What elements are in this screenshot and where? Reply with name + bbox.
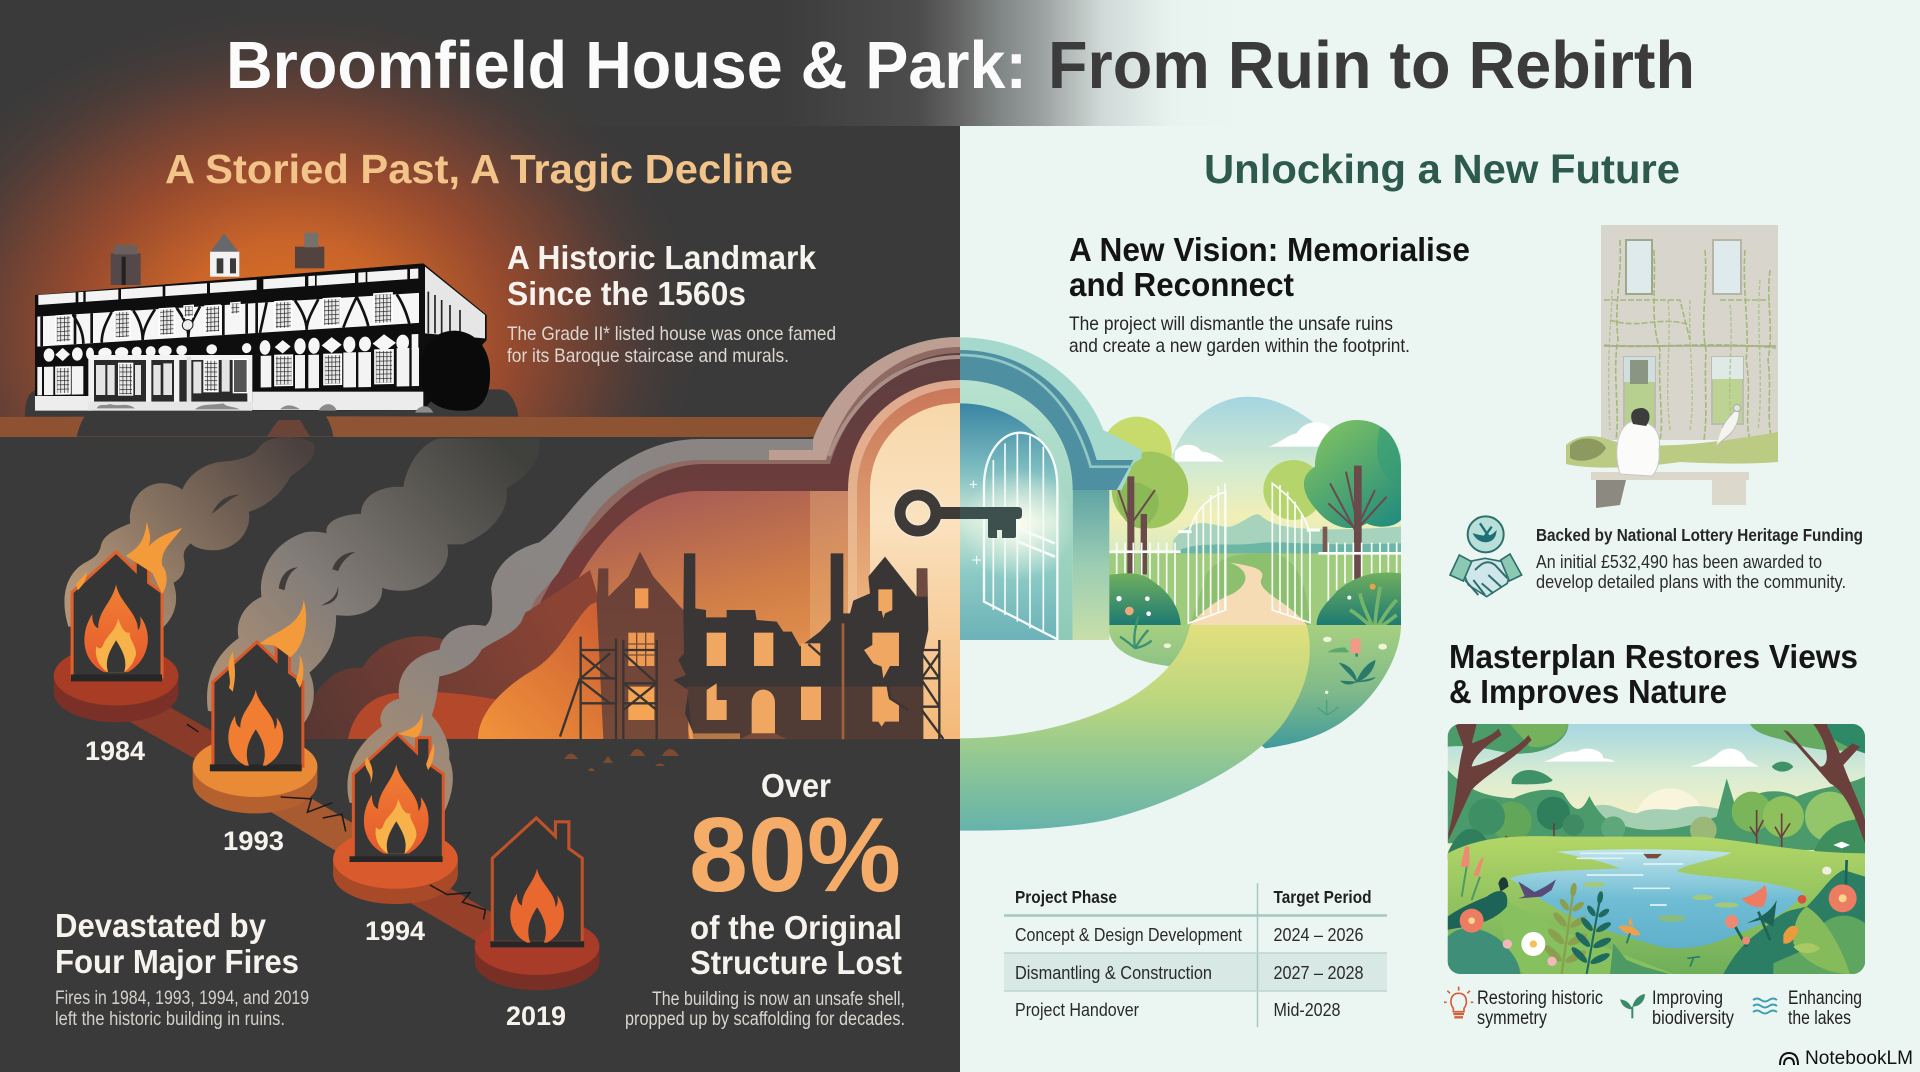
legend label: lakes — [1788, 988, 1862, 1029]
smoke plumes — [64, 437, 630, 814]
heading: masterplan: Masterplan Restores Views — [1449, 638, 1858, 675]
legend label: biodiversity — [1652, 988, 1734, 1029]
icon: lightbulb — [1444, 987, 1473, 1017]
road cracks — [187, 724, 485, 919]
project phase table: 2024 – 2026 — [1274, 924, 1364, 945]
legend label: biodiversity: Improving — [1652, 988, 1723, 1009]
green winding path swoosh — [960, 625, 1310, 831]
winding path — [1190, 563, 1307, 625]
legend label: symmetry — [1477, 988, 1603, 1029]
legend label: symmetry: symmetry — [1477, 1008, 1547, 1029]
statistic: over 80 percent: The building is now an unsafe shell, — [652, 989, 905, 1010]
title band gradient — [0, 0, 1920, 126]
small tree behind right — [1263, 460, 1316, 520]
year labels: 1984 — [85, 736, 145, 766]
statistic: over 80 percent: Over — [761, 767, 831, 804]
icon: sprout — [1620, 994, 1645, 1018]
light glow — [962, 468, 1075, 582]
text block: lottery funding: develop detailed plans with the community. — [1536, 571, 1846, 592]
historic black and white timber house — [25, 233, 518, 437]
garden sky — [1109, 396, 1401, 554]
key — [900, 495, 1022, 538]
statistic: over 80 percent: propped up by scaffolding for decades. — [625, 1009, 905, 1030]
heron — [1498, 877, 1508, 892]
milestone 1984 — [54, 521, 182, 722]
open white gate in doorway — [984, 433, 1057, 639]
light stripe on arch — [829, 357, 960, 456]
milestone 1994 — [333, 713, 458, 904]
statistic: over 80 percent: Structure Lost — [690, 944, 902, 981]
statistic: over 80 percent — [625, 767, 905, 1030]
project phase table: Project Handover — [1015, 999, 1139, 1020]
legend label: lakes: the lakes — [1788, 1008, 1851, 1029]
milestone 1993 — [193, 600, 317, 813]
background: mint rebirth half — [960, 0, 1920, 1072]
pink arch band and step — [769, 337, 960, 460]
project phase table: 2027 – 2028 — [1274, 962, 1364, 983]
foreground plants — [1500, 895, 1673, 974]
sunset sky — [578, 491, 848, 739]
heading: masterplan — [1449, 638, 1858, 710]
text block: devastated by fires: Fires in 1984, 1993, 1994, and 2019 — [55, 988, 309, 1009]
right half arch, door and garden — [960, 337, 1401, 831]
teal arch outer with stepped shoulder — [960, 337, 1142, 490]
right tree — [1304, 420, 1401, 578]
brown gable — [597, 552, 688, 739]
meadow — [1108, 553, 1401, 625]
smoke plume from 1993 fire — [207, 438, 540, 726]
smoke cloud dark red — [305, 570, 597, 739]
connecting paths — [116, 696, 255, 774]
heading: masterplan: & Improves Nature — [1449, 673, 1727, 710]
milestone 2019 — [475, 818, 599, 990]
memorial garden wall illustration — [1566, 225, 1778, 508]
distant hills — [1595, 804, 1719, 830]
text block: devastated by fires — [55, 907, 309, 1030]
cream door interior — [870, 403, 960, 739]
text block: new vision: The project will dismantle the unsafe ruins — [1069, 313, 1393, 335]
clouds — [1175, 445, 1224, 462]
arch highlight stripes — [960, 355, 1132, 467]
year labels: 1993 — [223, 826, 284, 856]
icon: water waves — [1753, 998, 1777, 1014]
flowers — [1742, 885, 1767, 907]
text block: devastated by fires: left the historic building in ruins. — [55, 1009, 285, 1030]
text block: new vision — [1069, 231, 1470, 357]
lighter vertical panel — [810, 491, 848, 639]
funding badge with handshake icon — [1450, 516, 1522, 597]
legend label: symmetry: Restoring historic — [1477, 988, 1603, 1009]
tree line — [1448, 770, 1865, 850]
project phase table: Target Period — [1274, 887, 1372, 907]
year labels — [85, 736, 566, 1031]
fire timeline — [54, 521, 599, 990]
heading: new future: Unlocking a New Future — [1204, 146, 1680, 192]
title: From Ruin to Rebirth — [1048, 28, 1695, 103]
text block: devastated by fires: Devastated by — [55, 907, 267, 944]
pale zone beside door — [1073, 490, 1109, 640]
text block: lottery funding: Backed by National Lottery Heritage Funding — [1536, 525, 1863, 545]
sparkles — [970, 481, 981, 564]
lake landscape illustration — [1448, 724, 1865, 978]
overhanging tree left — [1448, 724, 1568, 754]
smoke swirls — [212, 495, 355, 606]
text block: devastated by fires: Four Major Fires — [55, 943, 299, 980]
lily pads — [1583, 882, 1606, 887]
text block: historic landmark: The Grade II* listed house was once famed — [507, 323, 836, 345]
project phase table: Mid-2028 — [1274, 999, 1340, 1020]
gate leaves — [1178, 483, 1320, 623]
rubble below the ruin — [564, 749, 679, 771]
distant hills — [1173, 514, 1401, 554]
fire glow behind historic house — [0, 42, 663, 417]
burnt house ruin silhouette — [560, 552, 943, 739]
project phase table — [1004, 883, 1387, 1027]
text block: historic landmark — [507, 239, 836, 367]
bushes — [1108, 573, 1181, 625]
title — [226, 28, 1695, 103]
year labels: 2019 — [506, 1001, 566, 1031]
NotebookLM logo: NotebookLM — [1805, 1048, 1913, 1069]
project phase table: Project Phase — [1015, 887, 1117, 907]
year labels: 1994 — [365, 916, 425, 946]
salmon arch inner — [857, 388, 960, 599]
legend label: biodiversity: biodiversity — [1652, 1008, 1734, 1029]
statistic: over 80 percent: 80% — [689, 796, 901, 914]
thin brown arch band — [531, 347, 960, 610]
smoke cloud orange — [478, 590, 690, 739]
text block: lottery funding: An initial £532,490 has been awarded to — [1536, 551, 1822, 572]
smoke cloud red — [348, 692, 496, 739]
central ruin scene with arch, left half — [305, 337, 960, 739]
salmon arch outer — [848, 380, 960, 614]
scaffolding — [560, 637, 943, 739]
picket fences — [1108, 543, 1401, 607]
text block: historic landmark: Since the 1560s — [507, 275, 746, 312]
legend label: lakes: Enhancing — [1788, 988, 1862, 1009]
project phase table: Dismantling & Construction — [1015, 962, 1212, 983]
background: dark ruin half — [0, 0, 960, 1072]
heading: storied past: A Storied Past, A Tragic Decline — [165, 146, 793, 192]
dark ruin — [673, 553, 928, 739]
ground — [1448, 836, 1865, 974]
plants on lawn — [1120, 617, 1152, 648]
smoke plume from 1984 fire — [64, 437, 315, 627]
teal arch band — [960, 350, 1133, 490]
text block: lottery funding — [1536, 525, 1863, 592]
ground band — [0, 417, 840, 437]
left tree — [1102, 417, 1188, 573]
text block: historic landmark: A Historic Landmark — [507, 239, 817, 276]
text block: new vision: and create a new garden within the footprint. — [1069, 335, 1410, 357]
text block: new vision: A New Vision: Memorialise — [1069, 231, 1470, 268]
mint inner arch — [960, 380, 1073, 640]
project phase table: Concept & Design Development — [1015, 924, 1242, 945]
statistic: over 80 percent: of the Original — [690, 909, 902, 946]
maroon arch band — [540, 353, 960, 604]
title: Broomfield House & Park: — [226, 28, 1027, 103]
garden lawn — [1108, 625, 1401, 748]
text block: historic landmark: for its Baroque staircase and murals. — [507, 345, 789, 367]
text block: new vision: and Reconnect — [1069, 266, 1294, 303]
overhanging tree right — [1750, 724, 1865, 751]
glowing teal doorway — [960, 403, 1057, 640]
lake — [1510, 849, 1803, 948]
smoke plume from 1994 fire — [347, 458, 630, 814]
outer grey arch band — [526, 337, 958, 612]
